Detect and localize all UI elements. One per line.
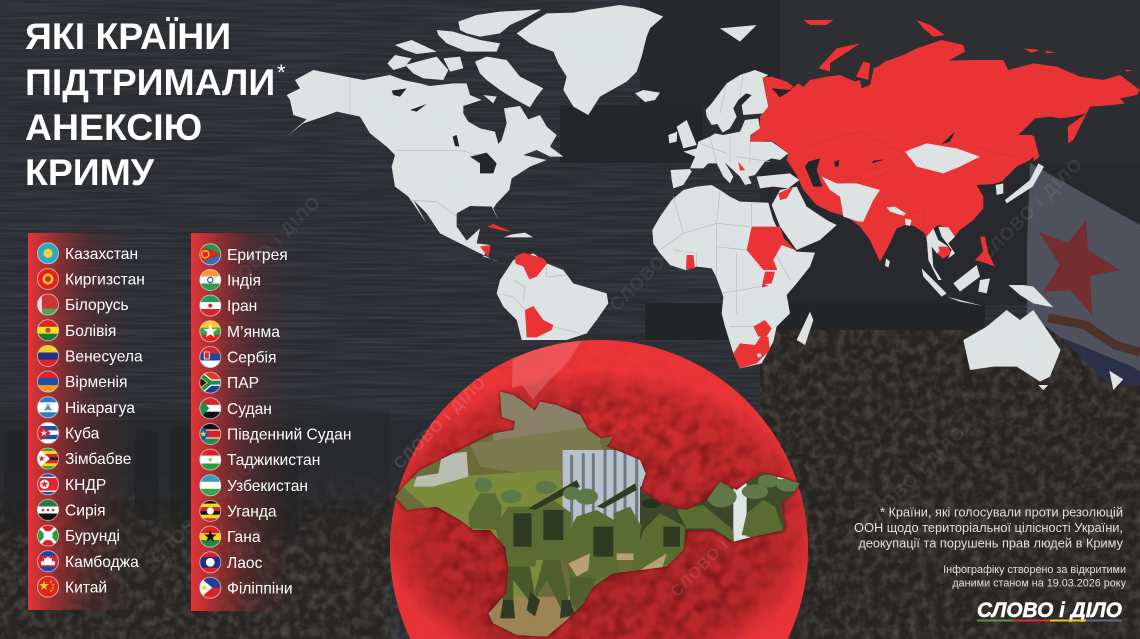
row: М’янма xyxy=(199,320,280,342)
row: Індія xyxy=(199,269,261,291)
Uganda and Burundi xyxy=(762,272,775,287)
row: Південний Судан xyxy=(199,423,351,445)
Sudan, South Sudan, Eritrea xyxy=(747,227,795,270)
row: ПАР: ПАР xyxy=(227,375,259,392)
row: Еритрея: Еритрея xyxy=(227,247,288,264)
South-East Asia xyxy=(927,227,955,280)
row: Казахстан: Казахстан xyxy=(65,246,138,263)
New Zealand xyxy=(1109,371,1123,390)
red globe with Crimea xyxy=(390,340,808,639)
icon: Armenia flag xyxy=(37,371,59,393)
row: КНДР: КНДР xyxy=(65,477,106,494)
watermarks: СЛОВО і ДІЛО xyxy=(147,457,258,568)
Philippines xyxy=(975,237,995,267)
title: АНЕКСІЮ xyxy=(25,106,202,148)
watermarks: СЛОВО і ДІЛО xyxy=(859,422,970,533)
icon: Sudan flag xyxy=(199,397,221,419)
row: Сирія xyxy=(37,499,106,521)
row: Індія: Індія xyxy=(227,273,261,290)
icon: Venezuela flag xyxy=(37,345,59,367)
row: Куба xyxy=(37,422,100,444)
footnote: * Країни, які голосували проти резолюцій xyxy=(880,504,1123,520)
row: Венесуела: Венесуела xyxy=(65,349,143,366)
lamps and silhouettes xyxy=(4,425,298,540)
Nicaragua xyxy=(480,245,491,257)
panel: country list, column 1 xyxy=(28,233,145,610)
row: Зімбабве: Зімбабве xyxy=(65,451,131,468)
row: Узбекистан: Узбекистан xyxy=(227,478,308,495)
row: Судан xyxy=(199,397,272,419)
row: Іран xyxy=(199,295,257,317)
row: Болівія xyxy=(37,319,116,341)
row: ПАР xyxy=(199,372,259,394)
European borders xyxy=(700,73,770,163)
row: Південний Судан: Південний Судан xyxy=(227,427,351,444)
Russia, Central Asia, China, India, Iran xyxy=(750,40,1140,262)
icon: South Sudan flag xyxy=(199,423,221,445)
Caspian, Aral, Balkhash, Baikal xyxy=(772,88,955,187)
Syria and Serbia xyxy=(738,162,793,200)
row: Китай: Китай xyxy=(65,579,107,596)
Cuba xyxy=(487,224,512,232)
source note: Інфографіку створено за відкритими xyxy=(943,564,1126,576)
row: Гана xyxy=(199,526,261,548)
source note xyxy=(943,564,1127,590)
icon: Kyrgyzstan flag xyxy=(37,268,59,290)
Zimbabwe xyxy=(753,320,772,337)
icon: North Korea flag xyxy=(37,473,59,495)
row: Нікарагуа xyxy=(37,396,135,418)
row: Сербія xyxy=(199,346,276,368)
title: КРИМУ xyxy=(25,151,155,193)
icon: Uzbekistan flag xyxy=(199,474,221,496)
row: Зімбабве xyxy=(37,448,131,470)
Europe xyxy=(668,25,799,188)
icon: Philippines flag xyxy=(199,577,221,599)
row: Лаос xyxy=(199,551,263,573)
Tasmania xyxy=(1038,385,1048,390)
icon: South Africa flag xyxy=(199,372,221,394)
African borders xyxy=(660,190,790,327)
icon: Laos flag xyxy=(199,551,221,573)
row: Бурунді xyxy=(37,525,120,547)
row: Судан: Судан xyxy=(227,401,272,418)
row: Казахстан xyxy=(37,242,138,264)
flag in the background xyxy=(1027,163,1140,385)
icon: Zimbabwe flag xyxy=(37,448,59,470)
row: Білорусь xyxy=(37,294,129,316)
row: Еритрея xyxy=(199,243,288,265)
Australia xyxy=(963,310,1061,382)
North America xyxy=(287,70,563,262)
Afghanistan and Pakistan xyxy=(822,177,880,222)
icon: Syria flag xyxy=(37,499,59,521)
Ghana xyxy=(686,255,695,269)
soldiers xyxy=(468,493,783,612)
footnote: ООН щодо територіальної цілісності України, xyxy=(854,520,1123,535)
title: ПІДТРИМАЛИ xyxy=(25,61,275,103)
row: Камбоджа: Камбоджа xyxy=(65,554,139,571)
icon: Serbia flag xyxy=(199,346,221,368)
row: Лаос: Лаос xyxy=(227,555,263,572)
icon: Uganda flag xyxy=(199,500,221,522)
icon: Eritrea flag xyxy=(199,243,221,265)
watermarks: СЛОВО і ДІЛО xyxy=(606,204,717,315)
row: Киргизстан xyxy=(37,268,145,290)
row: Таджикистан xyxy=(199,449,320,471)
Lesotho xyxy=(757,353,761,357)
row: Бурунді: Бурунді xyxy=(65,528,120,545)
red globe with Crimea: СЛОВО і ДІЛО xyxy=(668,502,767,601)
icon: Myanmar flag xyxy=(199,320,221,342)
row: Нікарагуа: Нікарагуа xyxy=(65,400,135,417)
icon: Belarus flag xyxy=(37,294,59,316)
red globe with Crimea: СЛОВО і ДІЛО xyxy=(391,374,490,473)
Korea and Japan xyxy=(996,163,1044,203)
Africa xyxy=(652,185,815,368)
row: КНДР xyxy=(37,473,106,495)
South Africa xyxy=(733,337,770,368)
row: Венесуела xyxy=(37,345,143,367)
panel: country list, column 2 xyxy=(191,233,351,611)
Greenland xyxy=(517,5,663,115)
Sri Lanka xyxy=(885,258,890,267)
Cambodia xyxy=(938,247,950,258)
South America on the globe xyxy=(512,340,582,400)
icon: Kazakhstan flag xyxy=(37,242,59,264)
row: Узбекистан xyxy=(199,474,308,496)
row: Куба: Куба xyxy=(65,426,100,443)
South America xyxy=(497,253,608,340)
row: Киргизстан: Киргизстан xyxy=(65,272,145,289)
icon: Nicaragua flag xyxy=(37,396,59,418)
row: Філіппіни: Філіппіни xyxy=(227,580,293,597)
Madagascar xyxy=(797,312,813,345)
title xyxy=(25,15,286,193)
icon: Cambodia flag xyxy=(37,550,59,572)
icon: India flag xyxy=(199,269,221,291)
row: Сербія: Сербія xyxy=(227,350,276,367)
row: Камбоджа xyxy=(37,550,139,572)
Crimea peninsula photo xyxy=(395,390,800,637)
icon: Ghana flag xyxy=(199,526,221,548)
Nepal and Bangladesh xyxy=(887,207,912,226)
Arctic islands xyxy=(387,9,543,107)
row: Уганда xyxy=(199,500,277,522)
watermarks xyxy=(147,154,1087,568)
Caribbean islands xyxy=(504,233,533,237)
world map: Americas and Greenland xyxy=(287,5,663,340)
world map: Europe, Africa, Asia, Oceania xyxy=(652,20,1140,390)
row: Таджикистан: Таджикистан xyxy=(227,452,320,469)
Venezuela xyxy=(515,253,547,279)
Iceland xyxy=(635,90,660,102)
row: Вірменія: Вірменія xyxy=(65,374,127,391)
Central Asia borders xyxy=(805,132,1017,233)
row: М’янма: М’янма xyxy=(227,324,280,341)
Arabia and Near East xyxy=(772,187,837,250)
row: Гана: Гана xyxy=(227,529,261,546)
wall xyxy=(563,450,649,530)
row: Філіппіни xyxy=(199,577,293,599)
row: Вірменія xyxy=(37,371,127,393)
truck xyxy=(413,452,468,487)
row: Білорусь: Білорусь xyxy=(65,297,129,314)
row: Сирія: Сирія xyxy=(65,503,106,520)
title: ЯКІ КРАЇНИ xyxy=(25,15,231,57)
icon: Tajikistan flag xyxy=(199,449,221,471)
watermarks: СЛОВО і ДІЛО xyxy=(976,154,1087,265)
icon: Burundi flag xyxy=(37,525,59,547)
row: Уганда: Уганда xyxy=(227,504,277,521)
footnote: деокупації та порушень прав людей в Криму xyxy=(858,536,1124,550)
row: Китай xyxy=(37,576,107,598)
icon: Cuba flag xyxy=(37,422,59,444)
icon: Bolivia flag xyxy=(37,319,59,341)
source note: даними станом на 19.03.2026 року xyxy=(952,578,1127,590)
Mongolia xyxy=(905,143,980,173)
Sakhalin and Kamchatka xyxy=(1033,113,1087,162)
row: Болівія: Болівія xyxy=(65,323,116,340)
Arctic Russia islands xyxy=(803,20,1133,80)
footnote xyxy=(854,504,1124,550)
icon: China flag xyxy=(37,576,59,598)
watermarks: СЛОВО і ДІЛО xyxy=(214,192,325,303)
row: Іран: Іран xyxy=(227,298,257,315)
lakes xyxy=(392,88,497,173)
Indonesia and New Guinea xyxy=(922,265,1053,307)
title: * xyxy=(277,60,286,85)
logo: Слово і діло: СЛОВО і ДІЛО xyxy=(977,598,1122,622)
icon: Iran flag xyxy=(199,295,221,317)
Bolivia xyxy=(525,306,553,337)
